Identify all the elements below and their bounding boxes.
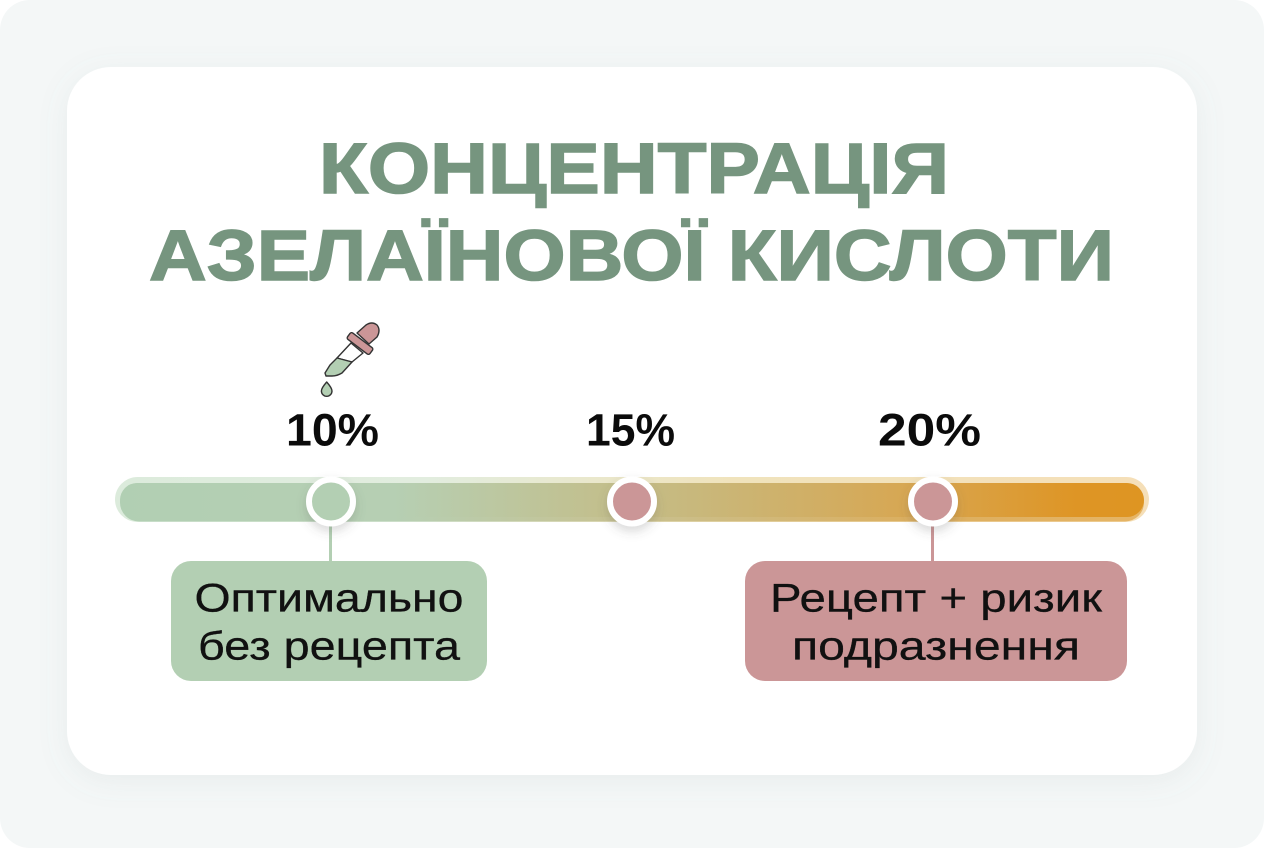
concentration scale (115, 477, 1149, 562)
percentage labels: 15% (586, 404, 675, 456)
dropper glass (337, 343, 363, 362)
percentage labels: 10% (286, 404, 379, 456)
callout: optimal: Оптимально (194, 576, 464, 620)
connector 10% (329, 525, 332, 562)
dropper liquid (325, 358, 352, 376)
callout: prescription and risk (745, 561, 1127, 681)
marker 10% (309, 480, 353, 524)
dropper collar (346, 332, 374, 355)
callout: prescription and risk: подразнення (792, 624, 1080, 668)
title: АЗЕЛАЇНОВОЇ КИСЛОТИ (149, 217, 1114, 296)
scale track (115, 477, 1149, 522)
marker 15% (610, 480, 654, 524)
percentage labels (286, 404, 981, 456)
callout: optimal: без рецепта (198, 624, 461, 668)
title: КОНЦЕНТРАЦІЯ (319, 130, 949, 209)
callout: prescription and risk: Рецепт + ризик (770, 576, 1103, 620)
marker 20% (911, 480, 955, 524)
title (149, 130, 1114, 296)
dropper bulb (357, 323, 379, 344)
connector 20% (931, 525, 934, 562)
icon: dropper (321, 323, 379, 396)
callout: optimal (171, 561, 487, 681)
white card (67, 67, 1197, 775)
drop (321, 382, 332, 396)
percentage labels: 20% (878, 404, 981, 456)
